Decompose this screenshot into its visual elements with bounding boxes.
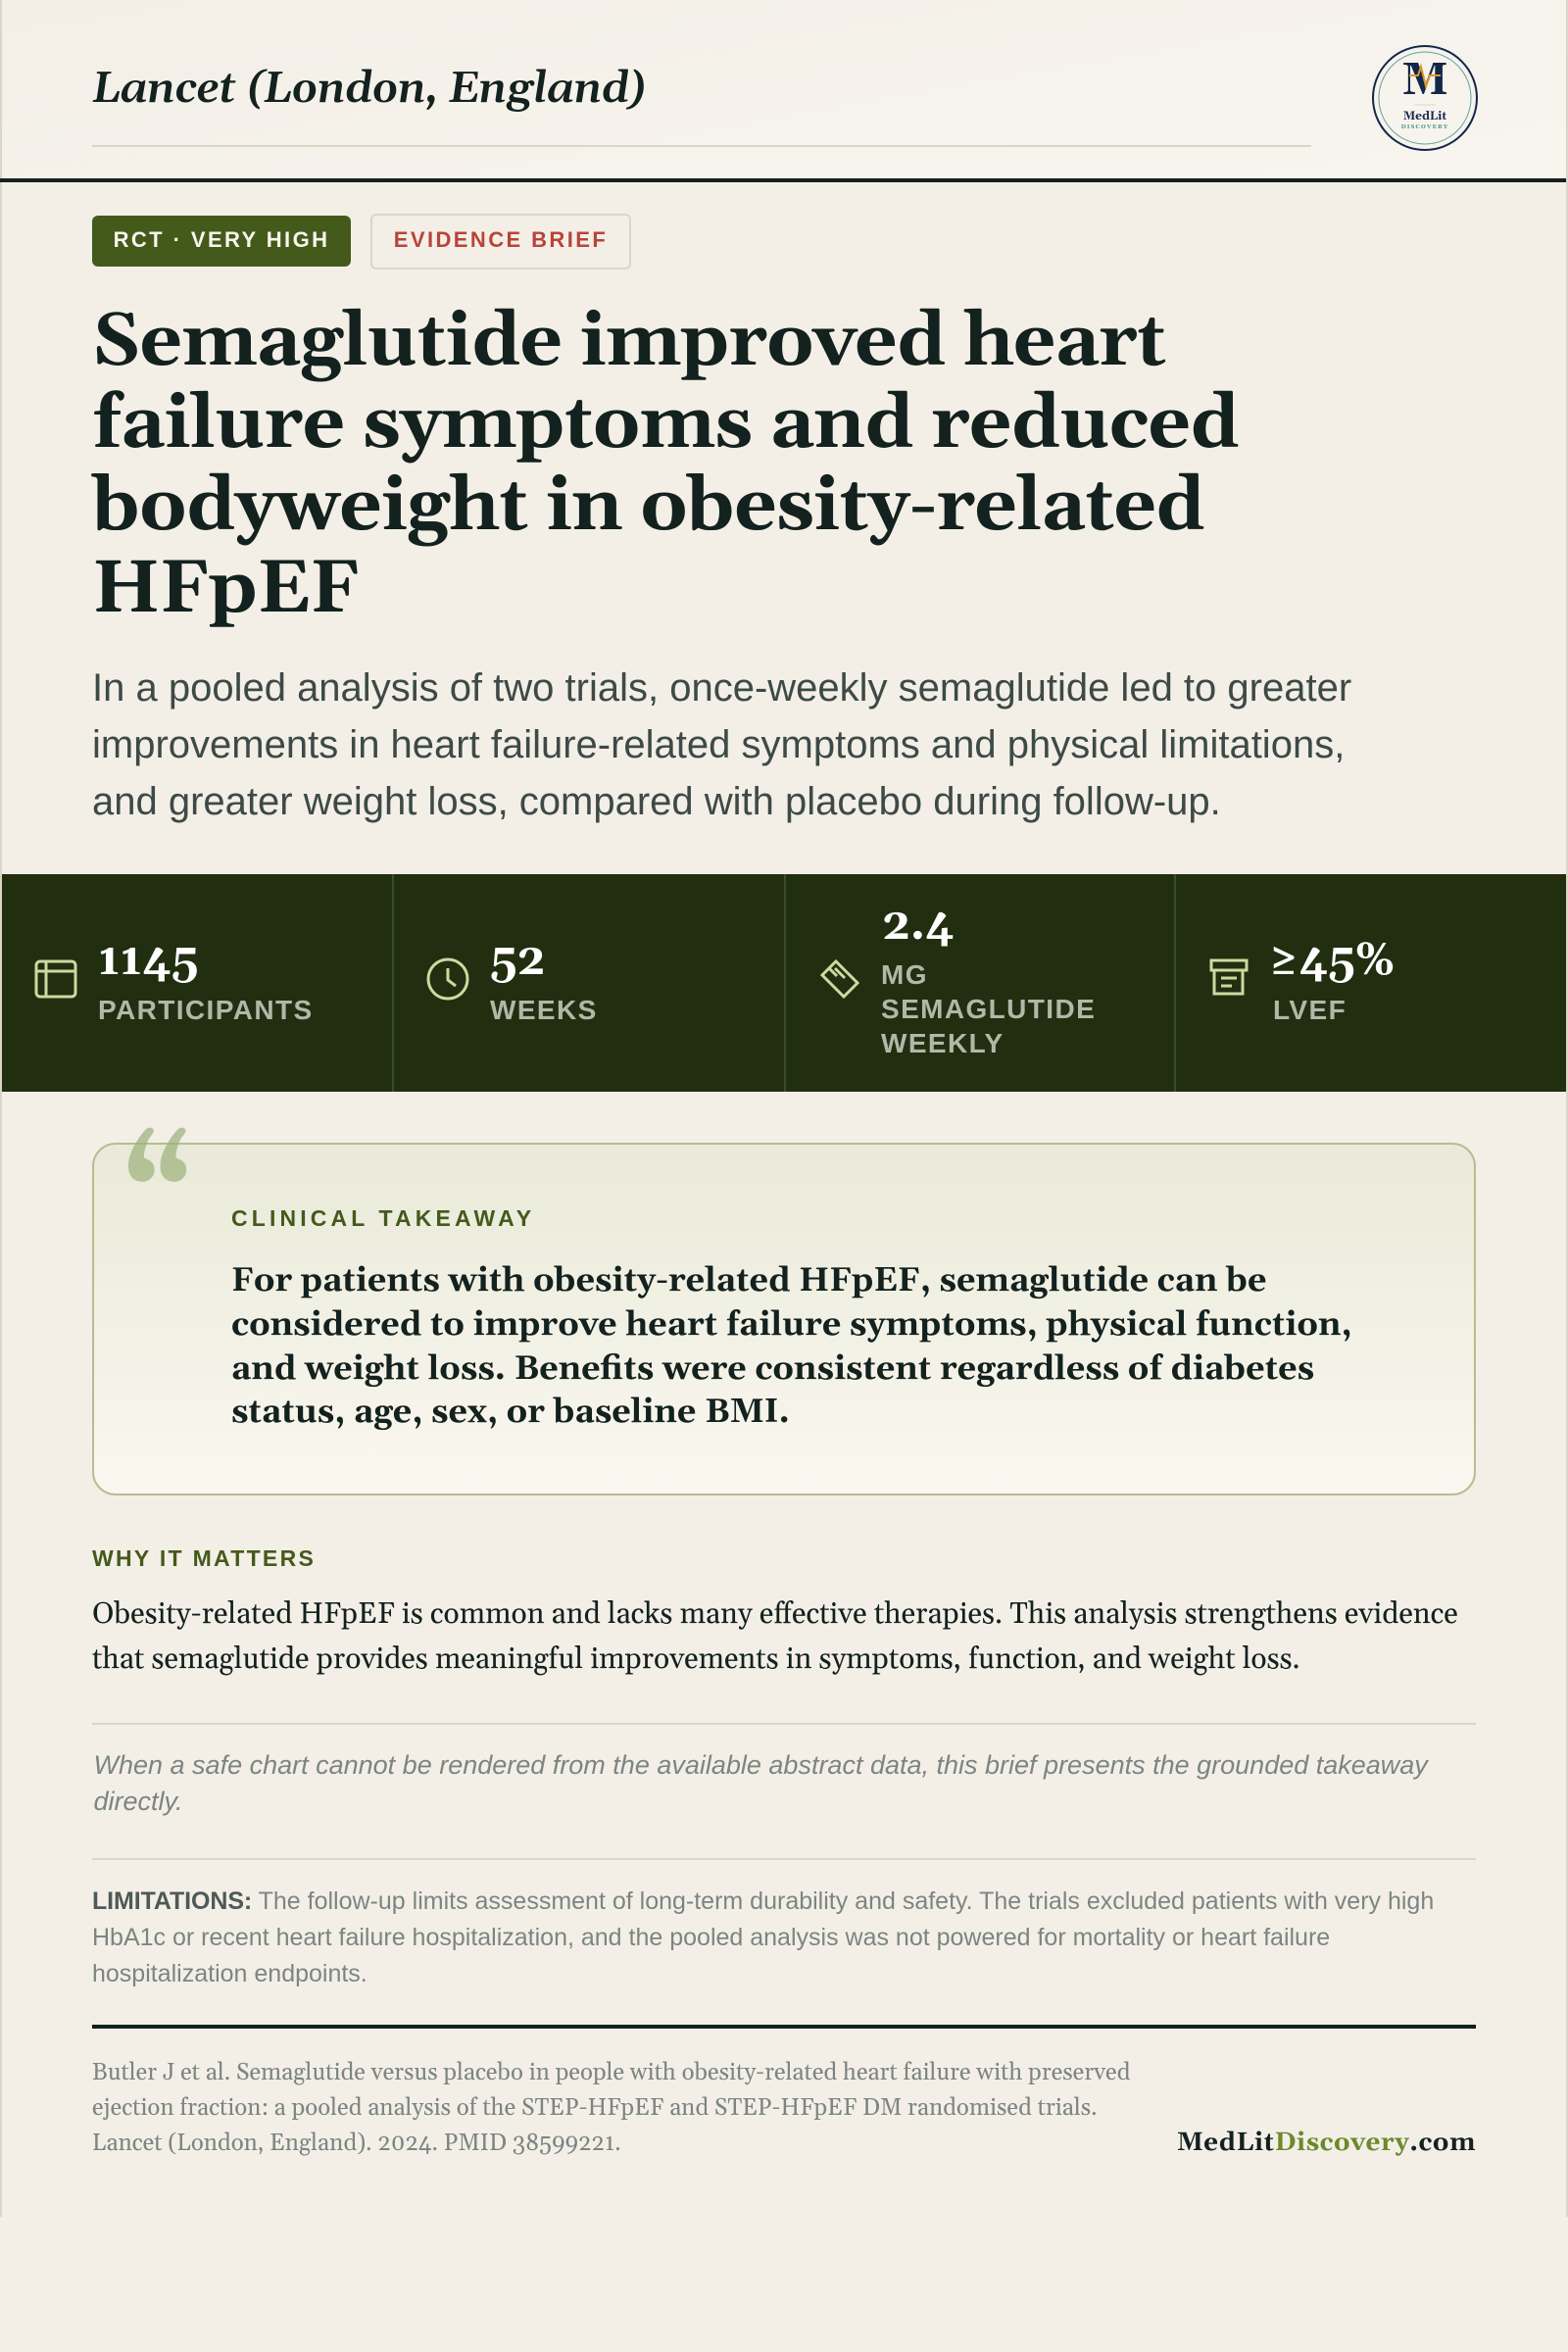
- logo: DISCOVERY: [1401, 123, 1448, 131]
- citation: ejection fraction: a pooled analysis of the STEP-HFpEF and STEP-HFpEF DM randomised trials.: [92, 2094, 1098, 2124]
- footer rule: [92, 2025, 1476, 2029]
- journal name: Lancet (London, England): [92, 63, 647, 118]
- limitations: HbA1c or recent heart failure hospitalization, and the pooled analysis was not powered for mortality or heart failure: [92, 1923, 1330, 1950]
- title: Semaglutide improved heart: [92, 295, 1165, 390]
- stat: dose: [820, 897, 1096, 1058]
- badge: evidence brief: [370, 214, 631, 270]
- takeaway text: considered to improve heart failure symptoms, physical function,: [231, 1303, 1352, 1347]
- takeaway text: [231, 1259, 1352, 1434]
- stats band: [2, 874, 1566, 1092]
- citation: Lancet (London, England). 2024. PMID 38599221.: [92, 2130, 621, 2159]
- why it matters text: [92, 1596, 1458, 1679]
- takeaway text: For patients with obesity-related HFpEF, semaglutide can be: [231, 1259, 1266, 1302]
- stat label: [881, 959, 1096, 1058]
- stat label: PARTICIPANTS: [98, 995, 314, 1025]
- icon: table: [35, 960, 76, 998]
- icon: box: [1209, 958, 1249, 996]
- citation: Butler J et al. Semaglutide versus placebo in people with obesity-related heart failure with preserved: [92, 2059, 1130, 2088]
- why it matters text: Obesity-related HFpEF is common and lacks many effective therapies. This analysis strengthens evidence: [92, 1596, 1458, 1634]
- title: [91, 295, 1239, 637]
- subtitle: [92, 666, 1351, 823]
- stat: lvef: [1209, 932, 1395, 1025]
- badge: RCT very high: [92, 216, 351, 267]
- badge: RCT very high: RCT · VERY HIGH: [114, 227, 329, 252]
- logo: M: [1401, 52, 1448, 110]
- chart note: [94, 1750, 1429, 1816]
- logo: MedLit: [1403, 110, 1446, 124]
- limitations: LIMITATIONS: The follow-up limits assessment of long-term durability and safety. The trials excluded patients with very high: [92, 1887, 1434, 1915]
- panel: clinical takeaway: [92, 1143, 1476, 1495]
- stat: participants: [35, 932, 314, 1025]
- limitations: hospitalization endpoints.: [92, 1960, 368, 1987]
- chart note: When a safe chart cannot be rendered from the available abstract data, this brief presents the grounded takeaway: [94, 1750, 1428, 1780]
- subtitle: improvements in heart failure-related symptoms and physical limitations,: [92, 723, 1345, 766]
- limitations: [92, 1887, 1434, 1987]
- stat label: SEMAGLUTIDE: [881, 994, 1096, 1024]
- chart note: directly.: [94, 1787, 183, 1816]
- badge: evidence brief: EVIDENCE BRIEF: [394, 227, 608, 252]
- why it matters text: that semaglutide provides meaningful improvements in symptoms, function, and weight loss.: [92, 1642, 1300, 1679]
- masthead bottom rule: [0, 178, 1566, 182]
- stat value: 1145: [98, 932, 198, 990]
- citation: [92, 2059, 1130, 2159]
- stat label: LVEF: [1273, 995, 1347, 1025]
- quote mark: “: [122, 1109, 193, 1331]
- stat label: WEEKS: [490, 995, 598, 1025]
- brand: MedLitDiscovery.com: [1177, 2127, 1476, 2159]
- stat label: MG: [881, 959, 928, 990]
- stat value: 52: [490, 932, 545, 990]
- takeaway text: status, age, sex, or baseline BMI.: [231, 1391, 790, 1434]
- rule: [92, 1723, 1476, 1725]
- takeaway label: CLINICAL TAKEAWAY: [231, 1205, 535, 1231]
- masthead rule: [92, 145, 1311, 147]
- icon: clock: [427, 958, 468, 1000]
- takeaway text: and weight loss. Benefits were consistent regardless of diabetes: [231, 1348, 1314, 1391]
- stat: weeks: [427, 932, 598, 1025]
- title: bodyweight in obesity-related: [92, 460, 1204, 555]
- stat value: ≥45%: [1267, 932, 1395, 990]
- subtitle: In a pooled analysis of two trials, once-weekly semaglutide led to greater: [92, 666, 1351, 710]
- masthead: [2, 0, 1566, 182]
- icon: ruler: [820, 959, 859, 999]
- title: HFpEF: [92, 542, 359, 637]
- rule: [92, 1858, 1476, 1860]
- stat value: 2.4: [882, 897, 955, 955]
- subtitle: and greater weight loss, compared with placebo during follow-up.: [92, 780, 1221, 823]
- logo: [1372, 45, 1478, 151]
- divider marks: [392, 874, 394, 1092]
- title: failure symptoms and reduced: [92, 377, 1239, 472]
- why it matters heading: WHY IT MATTERS: [92, 1545, 316, 1571]
- stat label: WEEKLY: [881, 1028, 1004, 1058]
